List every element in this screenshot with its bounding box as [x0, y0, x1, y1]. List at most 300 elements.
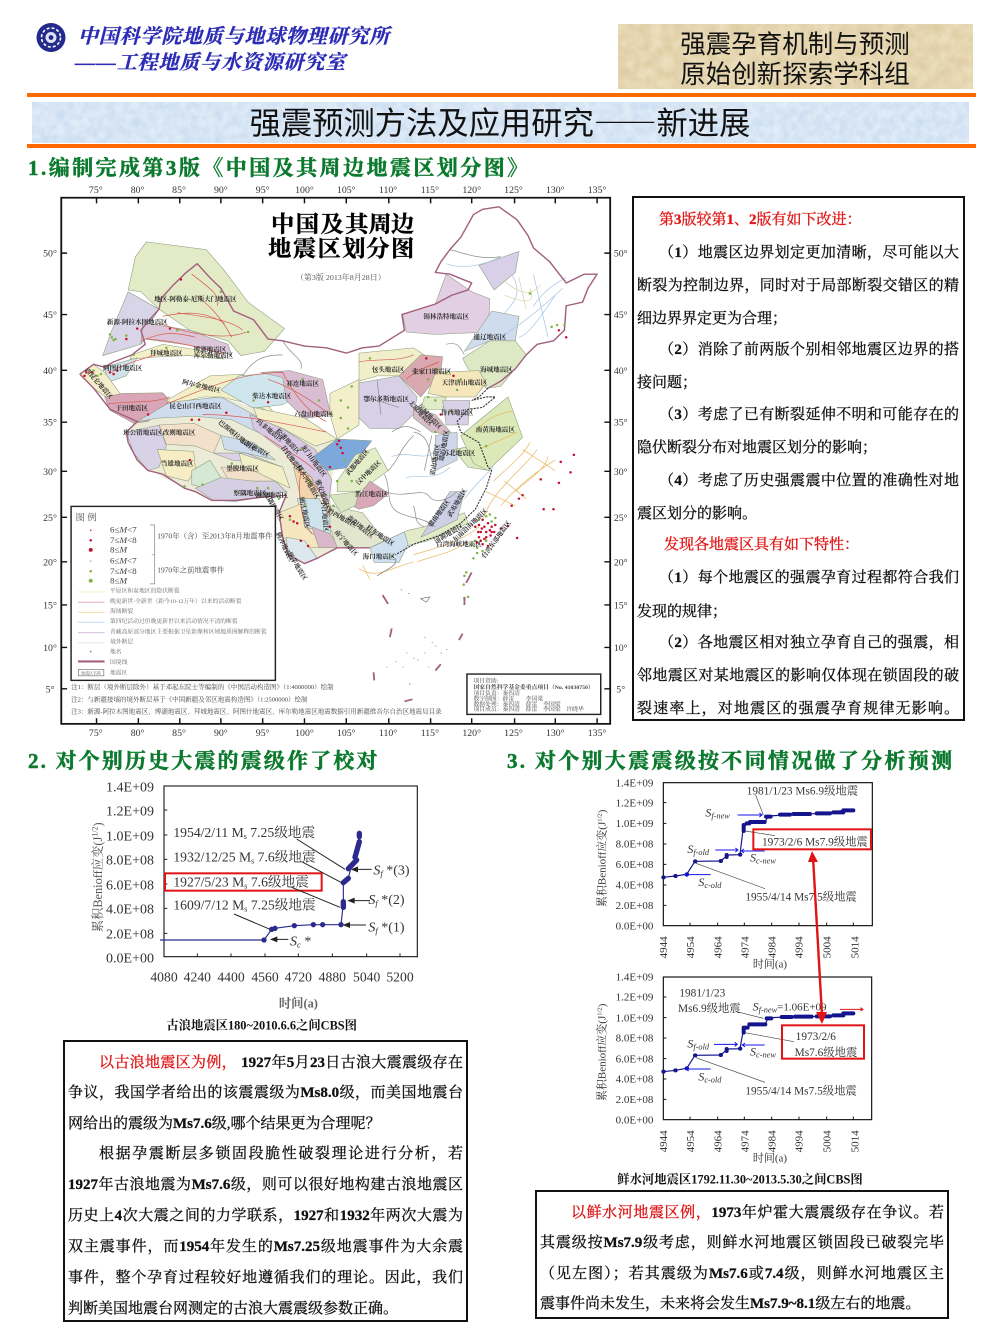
chart: Gulang CBS	[91, 780, 418, 1032]
x axis values: 5004	[821, 1130, 833, 1152]
y axis values: 6.0E+08	[106, 878, 154, 893]
legend line descriptions: 海域断裂	[110, 607, 133, 615]
x axis values: 5014	[850, 936, 862, 958]
y axis title: 累积Benioff应变(J	[91, 837, 105, 932]
S symbols with arrows: *(1)	[378, 920, 405, 935]
x axis values: 5004	[821, 936, 833, 958]
x axis values: 4964	[713, 936, 725, 958]
zone labels: 察隅地震区	[234, 488, 267, 497]
map date note: （第3版 2013年8月28日）	[296, 272, 386, 282]
longitude labels top: 110°	[379, 185, 397, 196]
zone labels: 贵阳地震区	[345, 513, 377, 540]
x axis values: 4240	[184, 969, 211, 984]
header: institute name	[74, 26, 392, 74]
legend line descriptions: 平原区和盆地区的隐伏断裂	[110, 587, 180, 595]
zone labels: 天津唐山地震区	[442, 378, 488, 387]
y axis title: 1/2	[91, 826, 100, 837]
zone labels: 腾冲地震区	[274, 531, 296, 563]
y axis values	[106, 780, 154, 967]
map title: 划	[342, 237, 366, 262]
map title: 中	[271, 212, 294, 237]
longitude labels bottom: 120°	[462, 728, 481, 739]
y axis title: 1/2	[597, 1007, 604, 1016]
latitude labels left: 15°	[43, 601, 57, 611]
y axis values: 1.4E+09	[106, 780, 154, 795]
zone labels: 思茅地震区	[285, 550, 310, 582]
legend line descriptions: 晚更新世-全新世（距今10-12万年）以来的活动断裂	[110, 597, 242, 605]
x axis values: 5200	[386, 969, 414, 984]
header: institute logo	[36, 23, 66, 52]
zone labels: 武都地震区	[343, 447, 371, 477]
zone labels: 于田地震区	[115, 403, 149, 412]
text: improvement 1: （1）地震区边界划定更加清晰，尽可能以大	[659, 245, 959, 261]
y axis title: )	[596, 1003, 608, 1007]
map coordinate ticks	[61, 198, 610, 724]
legend magnitudes: 8≤M	[110, 576, 128, 586]
leader lines	[234, 839, 345, 929]
longitude labels bottom: 95°	[256, 728, 270, 739]
zone labels: 班公错地震区	[123, 428, 163, 436]
text: improvement 4	[637, 472, 959, 522]
project info box	[467, 674, 601, 714]
text: improvement 2	[637, 341, 959, 391]
event annotations: s	[251, 857, 254, 866]
S symbols: S	[698, 1069, 704, 1083]
longitude labels top: 85°	[172, 185, 186, 196]
zone labels: 南宁地震区	[332, 528, 361, 558]
S symbols: S	[698, 875, 704, 889]
y axis values: 1.0E+09	[106, 829, 154, 844]
event annotations: 1609/7/12 M	[173, 898, 244, 913]
zone labels	[83, 294, 515, 582]
S symbols with arrows: f	[375, 925, 379, 935]
legend event groups: 1970年（含）至2013年8月地震事件	[157, 531, 273, 540]
project info box: 项目负责：秦四清	[474, 689, 520, 697]
zone labels: 拜城地震区	[150, 348, 183, 357]
event annotations: 7.25级地震	[247, 824, 316, 840]
text: Xianshuihe paragraph: 震事件尚未发生，未来将会发生Ms7.9~8.1级左右的地震。	[540, 1296, 920, 1312]
text: characteristic 1	[637, 569, 959, 620]
zone labels: 台湾海峡地震区	[436, 539, 482, 548]
S symbols with arrows: f	[375, 898, 379, 908]
x axis title: 时间(a)	[753, 1151, 787, 1165]
y axis values: 1.2E+09	[106, 804, 154, 819]
national border	[80, 207, 597, 564]
zone labels: 地区-阿勒泰-厄斯夫门地震区	[154, 294, 237, 303]
y axis values: 1.4E+09	[616, 777, 654, 789]
map title: 边	[391, 212, 414, 237]
zone labels: 桂东地震区	[364, 523, 397, 548]
header: institute name: 中国科学院地质与地球物理研究所	[78, 26, 390, 48]
zone labels: 柴达木地震区	[252, 391, 292, 400]
map title: 分	[366, 237, 390, 262]
title band	[32, 99, 969, 144]
orange rule bottom	[27, 144, 976, 148]
latitude labels left: 35°	[43, 418, 57, 429]
S symbols: S	[705, 805, 711, 819]
longitude labels top: 125°	[504, 185, 523, 196]
S symbols: S	[753, 999, 759, 1013]
latitude labels right: 5°	[616, 684, 625, 695]
text: Gulang paragraph 1: 以古浪地震区为例， 1927年5月23日古浪大震震级存在	[99, 1055, 463, 1071]
zone labels: 太原地震区	[407, 398, 436, 428]
latitude labels right: 25°	[614, 513, 628, 524]
latitude labels left: 25°	[43, 513, 57, 524]
longitude labels top: 75°	[89, 185, 103, 196]
x axis title: 时间(a)	[753, 956, 787, 970]
text: improvement 4: （4）考虑了历史强震震中位置的准确性对地	[659, 473, 959, 489]
latitude labels left: 50°	[43, 249, 57, 260]
legend magnitudes: 7≤M<8	[110, 566, 137, 576]
x axis values: 4994	[794, 1130, 806, 1152]
text: Gulang paragraph 2: 1927年古浪地震为Ms7.6级，则可以很好地构建古浪地震区	[68, 1177, 463, 1193]
coastline	[395, 388, 495, 555]
zone labels: 新源-阿拉木图地震区	[107, 317, 168, 326]
y axis values: 2.0E+08	[616, 1094, 654, 1106]
x axis values: 4400	[217, 969, 245, 984]
legend line descriptions: 青藏高原部分地区主要根据卫星影像和区域地质图解释的断裂	[110, 627, 267, 635]
y axis values: 8.0E+08	[106, 854, 154, 869]
longitude labels bottom	[89, 728, 607, 739]
x axis values: 5014	[850, 1130, 862, 1152]
S symbols: S	[750, 1044, 756, 1058]
y axis values: 1.2E+09	[616, 797, 654, 809]
map title: 震	[293, 237, 316, 262]
project info box: 数据处理：秦四清 薛雷 李国梁	[474, 700, 561, 708]
zone labels: 黔江地震区	[355, 489, 389, 498]
latitude labels left: 5°	[46, 684, 55, 695]
y axis values: 8.0E+08	[616, 1033, 654, 1045]
zone labels: 改则地震区	[163, 428, 196, 436]
S symbols: S	[750, 850, 756, 864]
x axis values: 4974	[740, 936, 752, 958]
text: improvement 4: 震区划分的影响。	[637, 506, 757, 522]
longitude labels bottom: 110°	[379, 728, 397, 739]
text: Gulang paragraph 2: 事件，整个孕育过程较好地遵循我们的理论。因此，我们	[68, 1270, 463, 1286]
x axis values: 4560	[251, 969, 279, 984]
event annotations: 1954/2/11 M	[173, 825, 244, 840]
zone labels: 海城地震区	[480, 364, 513, 373]
event annotations: 1955/4/14 Ms7.5级地震	[745, 890, 857, 904]
y axis title: )	[91, 822, 105, 826]
longitude labels top: 80°	[131, 185, 145, 196]
header: research group panel: 强震孕育机制与预测	[680, 24, 910, 61]
zone labels: 通辽地震区	[474, 332, 507, 341]
event annotations	[678, 987, 857, 1098]
text: improvement 2: 接问题；	[637, 375, 697, 391]
heading: section 1: 1.编制完成第3版《中国及其周边地震区划分图》	[28, 156, 531, 180]
event annotations: 1981/1/23	[679, 987, 726, 999]
zone labels: 河源地震区	[432, 521, 466, 545]
zone labels: 南黄海地震区	[476, 424, 515, 433]
y axis title: )	[596, 809, 608, 813]
zone labels: 墨脱地震区	[226, 464, 260, 473]
highlighted event box	[165, 873, 322, 891]
zone labels: 汉中地震区	[353, 458, 383, 487]
CBS curve	[663, 810, 853, 877]
legend line descriptions: 第四纪活动过但晚更新世以来活动情况不清的断裂	[110, 617, 238, 625]
zone labels: 博湖地震区	[194, 344, 227, 353]
map title: 图	[391, 237, 414, 262]
zone labels: 鄂尔多斯地震区	[363, 394, 410, 403]
S symbols with arrows: *(3)	[383, 864, 410, 879]
zone labels: 玉树地震区	[238, 436, 272, 459]
CBS curve	[160, 833, 360, 940]
x axis title: 时间(a)	[279, 995, 318, 1010]
y axis values: 2.0E+08	[106, 928, 154, 943]
y axis values: 1.0E+09	[616, 818, 654, 830]
latitude labels left: 40°	[43, 366, 57, 377]
text: characteristic 2: 邻地震区对某地震区的影响仅体现在锁固段的破	[637, 668, 959, 684]
S symbols with arrows: S	[373, 864, 380, 879]
header: research group panel: 原始创新探索学科组	[680, 54, 910, 91]
S symbols: =1.06E+09	[777, 1001, 827, 1013]
zone labels: 库尔勒地震区	[194, 351, 234, 360]
longitude labels top	[89, 185, 607, 196]
longitude labels bottom: 90°	[214, 728, 228, 739]
y axis title: 1/2	[597, 813, 604, 822]
legend line descriptions	[110, 587, 267, 676]
latitude labels left: 10°	[43, 643, 57, 654]
y axis title: 累积Benioff应变(J	[596, 1016, 608, 1101]
longitude labels bottom: 100°	[295, 728, 314, 739]
zone labels: 海口地震区	[363, 551, 396, 560]
panel: Gulang text	[63, 1040, 468, 1322]
S symbols	[687, 999, 827, 1084]
y axis values	[616, 777, 654, 932]
map title: 及	[320, 212, 344, 237]
legend line descriptions: 地震区	[110, 669, 128, 676]
S symbols	[687, 805, 776, 890]
y axis values: 6.0E+08	[616, 859, 654, 871]
heading: section 3: 3. 对个别大震震级按不同情况做了分析预测	[507, 749, 954, 773]
legend magnitudes: 6≤M<7	[110, 556, 137, 566]
legend magnitudes: 6≤M<7	[110, 525, 137, 535]
S symbols: f-new	[759, 1005, 778, 1014]
project info box: 数字制图：薛雷 李国梁	[474, 695, 543, 703]
zone labels: 郯庐地震区	[436, 429, 451, 462]
latitude labels right: 45°	[614, 310, 628, 321]
y axis values: 6.0E+08	[616, 1053, 654, 1065]
zone labels: 赣南地震区	[426, 497, 452, 528]
text: Gulang paragraph 2	[68, 1145, 463, 1317]
panel: map improvements	[632, 196, 965, 721]
map title: 周	[368, 212, 392, 237]
text: Gulang paragraph 1: 网给出的震级为Ms7.6级,哪个结果更为合理呢？	[68, 1116, 381, 1132]
event annotations: s	[244, 882, 247, 891]
legend symbols	[89, 528, 93, 532]
latitude labels left: 20°	[43, 557, 57, 568]
text: characteristic 2: 裂速率上，对地震区的强震孕育规律无影响。	[637, 701, 959, 717]
event annotations: 1981/1/23 Ms6.9级地震	[747, 783, 858, 797]
S symbols: c-old	[704, 881, 722, 890]
legend line keys	[78, 592, 105, 661]
y axis values: 0.0E+00	[616, 920, 654, 932]
x axis values	[150, 969, 414, 984]
longitude labels bottom: 130°	[546, 728, 565, 739]
legend line descriptions: 地名	[110, 648, 122, 656]
chart: Xianshuihe CBS with Ms7.6	[596, 972, 872, 1186]
y axis values: 2.0E+08	[616, 900, 654, 912]
plot frame	[663, 977, 872, 1120]
title band: 强震预测方法及应用研究——新进展	[250, 99, 750, 144]
text: Xianshuihe paragraph: 其震级按Ms7.9级考虑，则鲜水河地震区锁固段已破裂完毕	[540, 1235, 944, 1251]
zone labels: 雅安地震区	[313, 478, 333, 511]
S symbols with arrows: c	[297, 939, 301, 949]
zone labels: 巴颜喀拉地震区	[217, 418, 258, 453]
zone labels: 祁连地震区	[286, 379, 320, 387]
y axis values: 4.0E+08	[616, 1074, 654, 1086]
map notes: 注3：新源-阿拉木图地震区、博湖地震区、拜城地震区、阿图什地震区、库尔勒地震区地震数据引用新疆维吾尔自治区地震局目录	[71, 706, 442, 715]
latitude labels right: 40°	[614, 366, 628, 377]
y axis values	[616, 972, 654, 1126]
zone labels: 运城地震区	[416, 402, 445, 431]
caption: 古浪地震区180~2010.6.6之间CBS图	[166, 1017, 357, 1032]
South China Sea boundary dashes	[374, 572, 472, 701]
heading: section 2: 2. 对个别历史大震的震级作了校对	[28, 749, 380, 773]
zone labels: 昆仑山口西地震区	[169, 401, 222, 410]
S symbols with arrows: S	[290, 934, 297, 949]
x axis values	[658, 936, 862, 958]
zone labels: 锡林浩特地震区	[423, 312, 470, 320]
project info box: 项目资助:	[474, 677, 499, 684]
longitude labels bottom: 80°	[131, 728, 145, 739]
zone labels: 察隅地震区	[262, 490, 286, 523]
zone labels: 西昆仑地震区	[83, 366, 116, 401]
x axis values: 4964	[713, 1130, 725, 1152]
text: improvement 1: 细边界界定更为合理；	[637, 311, 787, 327]
text: Xianshuihe paragraph	[540, 1204, 944, 1312]
S symbols: c-new	[756, 1050, 776, 1059]
zone labels: 霍山地震区	[427, 443, 442, 476]
event annotations: s	[244, 905, 247, 914]
text: improvement 3: （3）考虑了已有断裂延伸不明和可能存在的	[659, 407, 959, 423]
event annotations: 1973/2/6	[796, 1031, 836, 1043]
zone labels: 鲁西地震区	[441, 408, 474, 416]
text: Gulang paragraph 2: 双主震事件，而1954年发生的Ms7.25级地震事件为大余震	[68, 1239, 463, 1255]
chart: Xianshuihe CBS with Ms7.9	[596, 777, 873, 970]
text: Gulang paragraph 1: 争议，我国学者给出的该震震级为Ms8.0级，而美国地震台	[68, 1085, 463, 1101]
event annotations: 1973/2/6 Ms7.9级地震	[762, 834, 868, 848]
y axis values: 1.4E+09	[616, 972, 654, 984]
x axis values: 4720	[285, 969, 312, 984]
x axis values: 4944	[658, 1130, 670, 1152]
event annotations	[173, 824, 316, 914]
x axis values: 4974	[740, 1130, 752, 1152]
map title: 区	[318, 237, 341, 262]
longitude labels top: 135°	[588, 185, 607, 196]
y axis values: 0.0E+00	[616, 1114, 654, 1126]
map notes: 注1：断层（境外断层除外）基于邓起东院士等编制的《中国活动构造图》（1:4000000）绘制	[71, 682, 334, 691]
faults	[108, 250, 566, 579]
latitude labels left: 45°	[43, 310, 57, 321]
zone labels: 龙门山地震区	[299, 442, 329, 479]
S symbols: c-old	[704, 1075, 722, 1084]
header: institute name: ——工程地质与水资源研究室	[75, 52, 346, 74]
S symbols: f-new	[711, 811, 730, 820]
longitude labels top: 120°	[462, 185, 481, 196]
latitude labels right: 35°	[614, 418, 628, 429]
y axis values: 0.0E+00	[106, 952, 154, 967]
text: Gulang paragraph 1	[68, 1054, 463, 1132]
longitude labels bottom: 75°	[89, 728, 103, 739]
project info box: 项目成员：秦四清 薛雷 李国梁 许晓华	[474, 705, 584, 713]
legend magnitudes: 7≤M<8	[110, 535, 137, 545]
latitude labels right	[614, 249, 628, 695]
panel: Xianshuihe text	[535, 1190, 949, 1319]
x axis values	[658, 1130, 862, 1152]
orange rule top	[27, 93, 976, 97]
latitude labels right: 50°	[614, 249, 628, 260]
text: characteristic 1: 发现的规律；	[637, 604, 727, 620]
event annotations: Ms6.9级地震	[678, 1001, 741, 1015]
map title	[268, 212, 414, 262]
leader lines	[696, 795, 775, 889]
event annotations: 1927/5/23 M	[173, 875, 244, 890]
text: characteristic 2	[637, 634, 959, 717]
x axis values: 4880	[319, 969, 346, 984]
y axis values: 4.0E+08	[106, 903, 154, 918]
event annotations: 7.6级地震	[247, 874, 309, 890]
map title: 地	[268, 237, 292, 262]
S symbols: c-new	[756, 856, 776, 865]
zone labels: 黔西地震区	[326, 506, 359, 530]
zone labels: 包头地震区	[372, 365, 405, 374]
zone labels: 六盘山地震区	[294, 409, 334, 418]
longitude labels top: 130°	[546, 185, 565, 196]
text: Gulang paragraph 2: 判断美国地震台网测定的古浪大震震级参数正确。	[68, 1301, 398, 1317]
earthquake events: recent	[85, 279, 574, 546]
map notes: 注2：与新疆接壤的境外断层基于《中国新疆及邻区地震构造图》（1:2500000）绘制	[71, 695, 308, 703]
text: Gulang paragraph 2: 根据孕震断层多锁固段脆性破裂理论进行分析，若	[99, 1146, 463, 1162]
longitude labels bottom: 85°	[172, 728, 186, 739]
zone labels: 东南沿海地震区	[451, 506, 490, 544]
legend panel	[71, 506, 275, 680]
S symbols with arrows: *(2)	[378, 893, 405, 908]
S symbols with arrows	[270, 864, 410, 949]
legend event groups: 1970年之前地震事件	[157, 565, 225, 574]
event annotations: Ms7.6级地震	[795, 1045, 857, 1059]
zone labels: 小江地震区	[319, 500, 331, 533]
arrow: link between charts	[808, 851, 827, 1024]
S arrows blue	[683, 813, 765, 877]
text: improvement 1	[637, 244, 959, 327]
event annotations: 7.6级地震	[254, 849, 316, 865]
text: characteristics heading: 发现各地震区具有如下特性：	[664, 537, 859, 553]
zone labels: 丽江地震区	[298, 496, 313, 529]
legend magnitudes	[110, 525, 137, 586]
zone labels: 玛多地震区	[254, 417, 286, 444]
x axis values: 4944	[658, 936, 670, 958]
project info box: 国家自然科学基金委重点项目（No. 41030750）	[474, 683, 594, 691]
x axis values: 5040	[353, 969, 380, 984]
islands	[377, 558, 447, 685]
zone labels: 武夷地震区	[445, 486, 469, 519]
S arrows	[685, 1042, 765, 1071]
legend event groups	[157, 531, 273, 574]
text: Xianshuihe paragraph: 以鲜水河地震区例，1973年炉霍大震震级存在争议。若	[571, 1205, 944, 1221]
seismic zones	[80, 242, 526, 564]
longitude labels top: 90°	[214, 185, 228, 196]
seismic zoning map	[43, 185, 628, 739]
zone labels: 松潘地震区	[274, 426, 303, 456]
text: improvement 3	[637, 406, 959, 456]
header: research group panel	[618, 24, 973, 91]
map title: 国	[296, 212, 319, 237]
latitude labels left	[43, 249, 57, 695]
y axis values: 8.0E+08	[616, 839, 654, 851]
latitude labels right: 30°	[614, 467, 628, 478]
